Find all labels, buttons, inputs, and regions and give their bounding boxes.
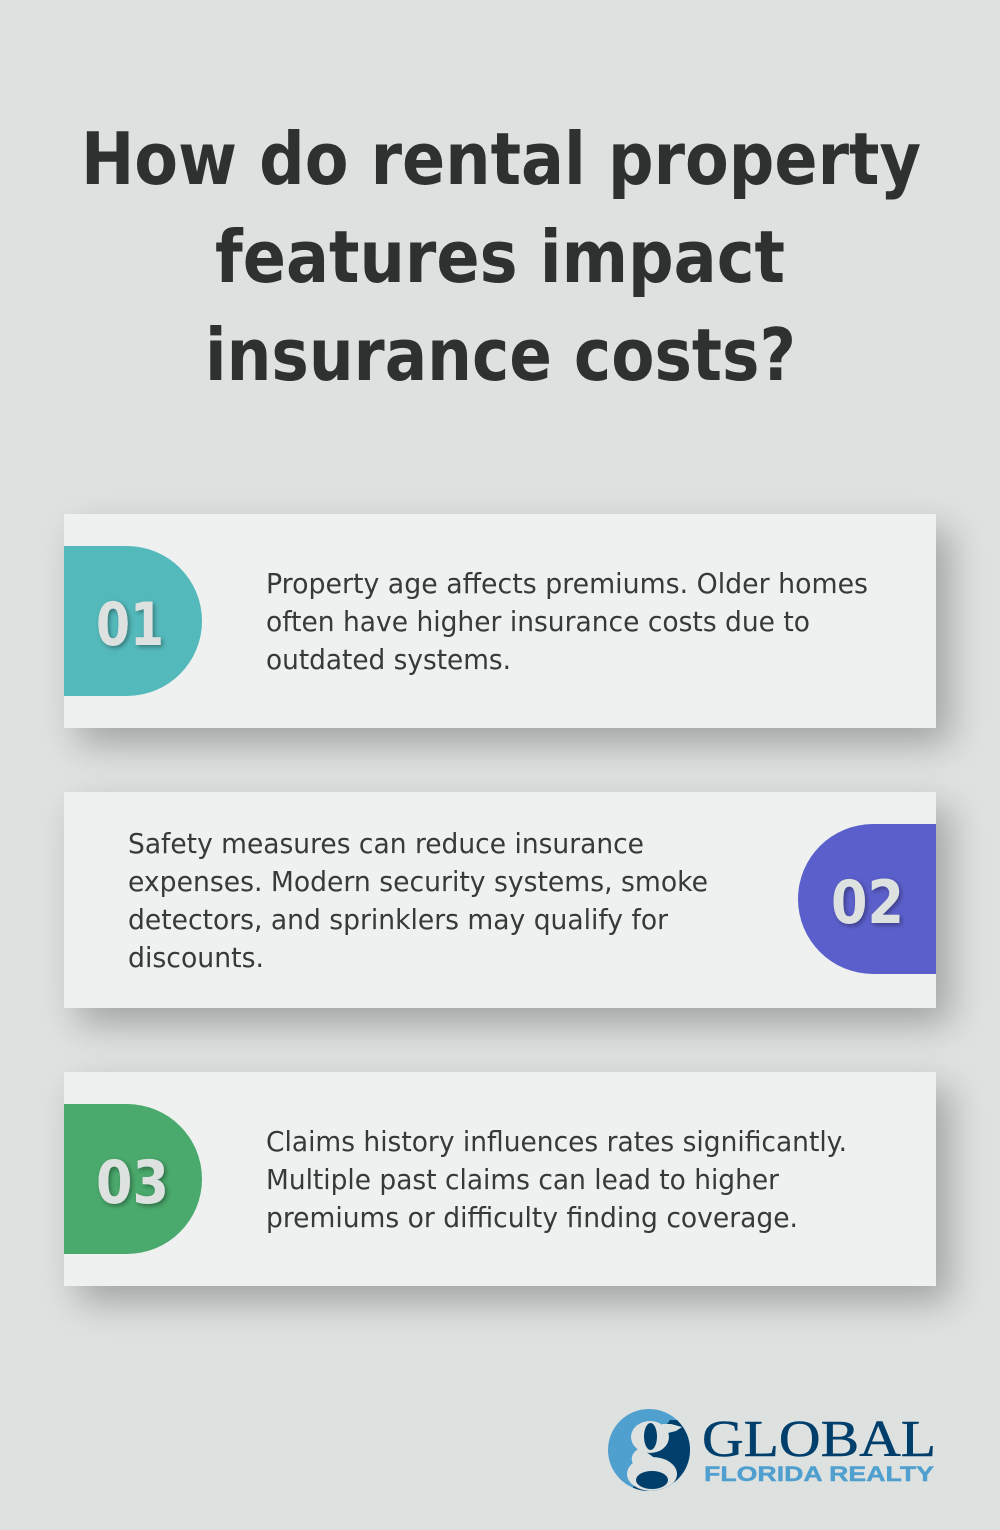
panel: claims history [64, 1072, 950, 1302]
logo: Global Florida Realty [608, 1409, 936, 1492]
badge: 02: 02 [831, 868, 904, 938]
text: claims history: Claims history influences rates significantly. [266, 1125, 847, 1158]
text: logo wordmark: GLOBAL [702, 1411, 936, 1468]
title [81, 117, 921, 397]
panel: property age [64, 514, 950, 744]
text: safety measures: Safety measures can reduce insurance [128, 827, 644, 860]
badge: 02 [798, 824, 936, 974]
text: claims history: Multiple past claims can lead to higher [266, 1163, 779, 1196]
badge: 01: 01 [96, 590, 164, 660]
text: safety measures: discounts. [128, 941, 264, 974]
title: features impact [215, 215, 785, 299]
text: property age: outdated systems. [266, 643, 511, 676]
badge: 03: 03 [96, 1148, 169, 1218]
title: insurance costs? [205, 313, 796, 397]
badge: 03 [64, 1104, 202, 1254]
text: safety measures: detectors, and sprinklers may qualify for [128, 903, 668, 936]
text: claims history: premiums or difficulty finding coverage. [266, 1201, 798, 1234]
text: property age: Property age affects premiums. Older homes [266, 567, 868, 600]
icon: g emblem [608, 1409, 692, 1492]
text: property age: often have higher insurance costs due to [266, 605, 810, 638]
text: logo wordmark [702, 1411, 936, 1486]
text: property age [266, 567, 868, 676]
text: logo wordmark: FLORIDA REALTY [704, 1463, 934, 1486]
text: safety measures: expenses. Modern security systems, smoke [128, 865, 708, 898]
text: claims history [266, 1125, 847, 1234]
text: safety measures [128, 827, 708, 974]
panel: safety measures [64, 792, 950, 1024]
badge: 01 [64, 546, 202, 696]
